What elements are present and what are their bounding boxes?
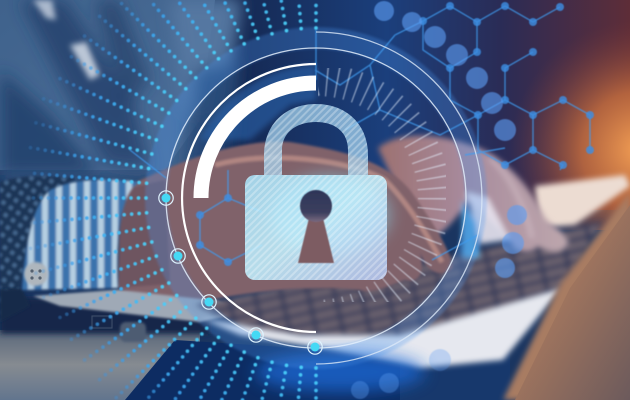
cuff button [24, 262, 48, 286]
large translucent circles [351, 1, 527, 399]
hand right [378, 136, 568, 258]
shirt cuff [22, 180, 140, 290]
hexagon network [130, 6, 590, 262]
keyboard [195, 222, 602, 340]
outer ring right side [316, 32, 482, 364]
network nodes [196, 2, 594, 266]
upper right dark blurred background [225, 0, 630, 230]
palm rest [200, 288, 562, 368]
padlock [245, 104, 390, 280]
suit jacket [0, 0, 240, 180]
shackle [264, 104, 368, 175]
keyhole [298, 190, 334, 263]
ring nodes [159, 191, 322, 354]
cyan bloom behind lock [270, 175, 390, 255]
rings and progress arc [166, 32, 482, 364]
middle ring [166, 48, 466, 348]
glow band between rings [156, 38, 476, 358]
table and laptop base left [0, 285, 490, 400]
bright blue glow at bottom [255, 352, 425, 392]
white gap between fingers [466, 192, 510, 244]
white paper behind hands [535, 175, 630, 228]
inner ring left side [182, 64, 316, 332]
thick white arc [201, 83, 316, 198]
laptop screen foreground [503, 192, 630, 400]
tick marks arc [318, 68, 446, 302]
blue tint inside circle [200, 65, 316, 140]
lock body [245, 175, 387, 280]
hand left [118, 142, 453, 300]
shirt sleeve [0, 176, 140, 322]
radial dot pattern [26, 0, 316, 400]
jacket highlights [33, 0, 100, 80]
laptop bottom right dark [400, 350, 510, 400]
